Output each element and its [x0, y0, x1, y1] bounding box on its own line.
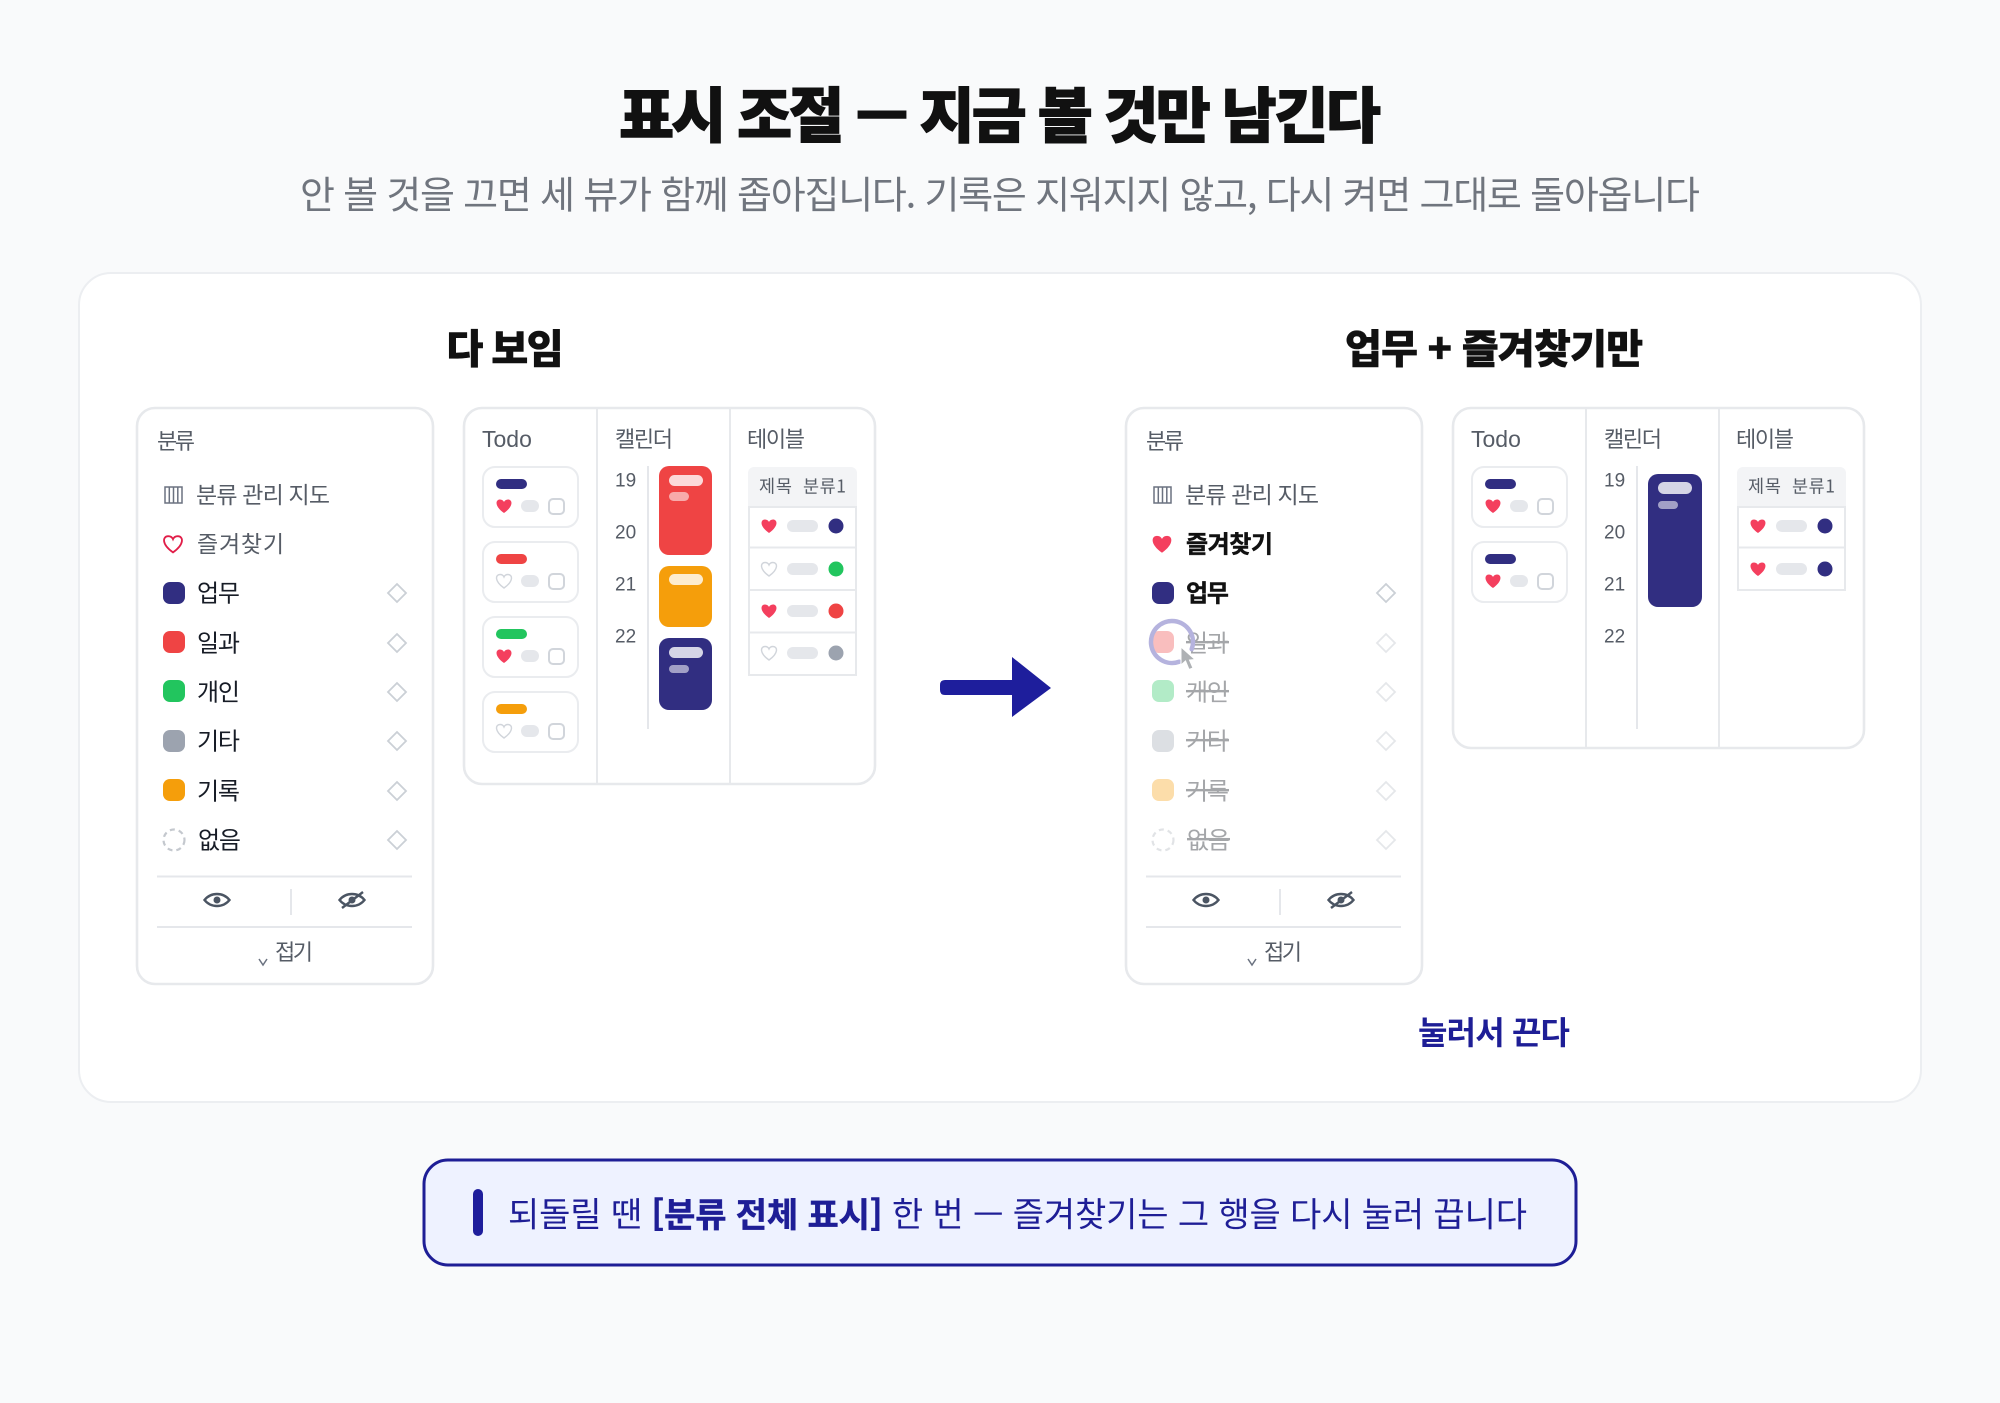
- title: 표시 조절 — 지금 볼 것만 남긴다: [619, 68, 1381, 156]
- panel: right category sidebar: [1126, 408, 1422, 984]
- personal row off: [1152, 672, 1395, 708]
- table row 4: [762, 646, 844, 660]
- icon: show all: [1194, 894, 1218, 906]
- event: navy long: [1648, 474, 1702, 607]
- other row off: 기타: [1186, 722, 1229, 756]
- todo card 2: [1472, 542, 1567, 602]
- todo column: [1471, 426, 1567, 602]
- table column: 제목: [1748, 474, 1781, 498]
- table column: 제목: [759, 474, 792, 498]
- favorites row: 즐겨찾기: [197, 525, 284, 559]
- event: red: [659, 466, 712, 555]
- event: orange: [659, 566, 712, 627]
- calendar column: 캘린더: [615, 422, 673, 454]
- panel: left category sidebar: [137, 408, 433, 984]
- table row 2: [762, 562, 844, 576]
- none row: [164, 820, 406, 856]
- none row: 없음: [198, 820, 241, 856]
- event: navy: [659, 638, 712, 710]
- calendar column: 21: [615, 574, 636, 596]
- calendar column: [615, 422, 712, 729]
- daily row: 일과: [197, 624, 240, 658]
- personal row off: 개인: [1186, 672, 1229, 708]
- callout accent bar: [473, 1189, 483, 1236]
- category map row: 분류 관리 지도: [1185, 476, 1319, 510]
- calendar column: 19: [1604, 470, 1625, 492]
- icon: hide all: [1328, 892, 1354, 908]
- sidebar heading: 분류: [157, 424, 195, 456]
- icon: hide all: [340, 892, 364, 908]
- heading: work plus favorites only: 업무 + 즐겨찾기만: [1345, 317, 1643, 375]
- todo card 1: [1472, 467, 1567, 527]
- calendar column: 22: [1604, 626, 1625, 648]
- category map row: 분류 관리 지도: [196, 476, 330, 510]
- other row: 기타: [197, 722, 240, 756]
- none row off: 없음: [1187, 820, 1230, 856]
- table row 2: [1751, 562, 1832, 576]
- record row off: 기록: [1186, 772, 1229, 806]
- daily row off: 일과: [1186, 624, 1229, 658]
- panel: main card: [79, 273, 1921, 1102]
- work row: [163, 574, 406, 608]
- work row active: [1152, 574, 1395, 608]
- table column: 분류1: [1792, 474, 1835, 498]
- calendar column: 캘린더: [1604, 422, 1662, 454]
- arrow: [940, 657, 1051, 717]
- todo column: Todo: [482, 426, 532, 452]
- personal row: 개인: [197, 672, 240, 708]
- record row off: [1152, 772, 1395, 806]
- table column: [1736, 422, 1846, 590]
- favorites row active: 즐겨찾기: [1186, 524, 1273, 560]
- record row: [163, 772, 406, 806]
- daily row off: [1152, 624, 1395, 658]
- panel: right three views: [1453, 408, 1864, 748]
- calendar column: 22: [615, 626, 636, 648]
- todo card: work: [483, 467, 578, 527]
- table column: 테이블: [1736, 422, 1794, 454]
- todo card: personal: [483, 617, 578, 677]
- todo column: Todo: [1471, 426, 1521, 452]
- heading: all visible: 다 보임: [446, 317, 564, 375]
- calendar column: 20: [615, 522, 636, 544]
- table row 1: [1751, 518, 1832, 534]
- callout text: 되돌릴 땐 [분류 전체 표시] 한 번 — 즐겨찾기는 그 행을 다시 눌러 끕니다: [508, 1188, 1527, 1236]
- personal row: [163, 672, 406, 708]
- callout: [424, 1160, 1576, 1265]
- table row 3: [762, 604, 844, 618]
- calendar column: 21: [1604, 574, 1625, 596]
- todo column: [482, 426, 578, 752]
- todo card: record: [483, 692, 578, 752]
- daily row: [163, 624, 406, 658]
- collapse control: 접기: [275, 935, 313, 967]
- table column: [747, 422, 857, 675]
- other row: [163, 722, 406, 756]
- calendar column: 20: [1604, 522, 1625, 544]
- todo card: daily: [483, 542, 578, 602]
- table column: 분류1: [803, 474, 846, 498]
- collapse control: 접기: [1264, 935, 1302, 967]
- subtitle: 안 볼 것을 끄면 세 뷰가 함께 좁아집니다. 기록은 지워지지 않고, 다시 켜면 그대로 돌아옵니다: [300, 164, 1700, 220]
- record row: 기록: [197, 772, 240, 806]
- none row off: [1152, 820, 1395, 856]
- click ring and cursor: [1151, 621, 1195, 670]
- work row active: 업무: [1186, 574, 1229, 608]
- calendar column: [1604, 422, 1702, 729]
- other row off: [1152, 722, 1395, 756]
- icon: show all: [204, 894, 230, 906]
- table row 1: [762, 518, 844, 534]
- panel: left three views: [464, 408, 875, 784]
- calendar column: 19: [615, 470, 636, 492]
- table column: 테이블: [747, 422, 805, 454]
- work row: 업무: [197, 574, 240, 608]
- annotation: press to turn off: 눌러서 끈다: [1418, 1008, 1570, 1054]
- sidebar heading: 분류: [1146, 424, 1184, 456]
